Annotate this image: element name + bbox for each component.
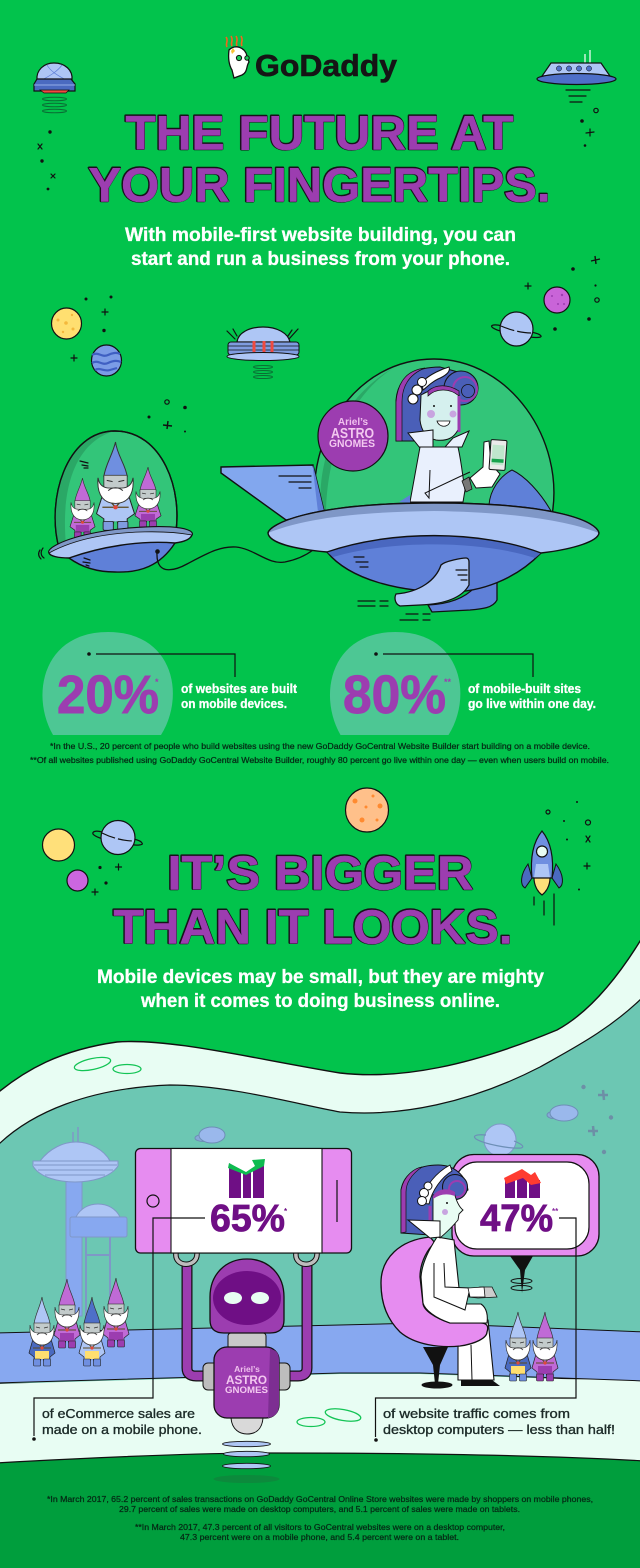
pink planet (67, 870, 88, 891)
title: THE FUTURE AT (126, 107, 514, 160)
yellow planet lower (42, 829, 74, 861)
logo mascot (226, 36, 249, 78)
gnome pair right (505, 1312, 558, 1381)
phone in hand (489, 439, 507, 471)
dome mound (489, 470, 551, 511)
title: THE FUTURE AT (125, 107, 513, 160)
robot body (214, 1347, 279, 1418)
robot arms (187, 1262, 210, 1376)
orange planet (346, 788, 388, 832)
robot thrust rings (222, 1441, 270, 1447)
caption right (383, 1406, 615, 1437)
stat: 80 percent: go live within one day. (468, 697, 596, 711)
stars mid left (148, 400, 187, 432)
heading 2 (113, 847, 512, 954)
stat number: 20% (57, 665, 159, 725)
small floating saucer (195, 1127, 225, 1143)
robot label: GNOMES (225, 1385, 268, 1396)
saucer disc (268, 503, 599, 553)
astronaut (396, 367, 507, 503)
robot label: ASTRO (226, 1373, 267, 1387)
stars upper right (525, 256, 600, 331)
stars right (580, 108, 598, 147)
small saucer hull (69, 541, 175, 572)
connecting cable (157, 547, 313, 570)
stat: 20 percent: * (155, 677, 159, 687)
purple planet (544, 287, 570, 313)
footnotes bottom: 29.7 percent of sales were made on desktop computers, and 5.1 percent of sales were made on tablets. (119, 1504, 520, 1514)
robot label: Ariel’s (234, 1364, 260, 1374)
robot (176, 1253, 317, 1483)
saturn lower (93, 820, 142, 854)
gnome group left (29, 1278, 129, 1366)
subheading 2: Mobile devices may be small, but they are mighty (97, 967, 544, 988)
small centre ufo (227, 327, 299, 378)
icon: bars (228, 1159, 265, 1198)
phone stat panel: * (284, 1207, 288, 1216)
gnome centre (97, 442, 134, 530)
light band wave (0, 933, 640, 1568)
gnome right (135, 467, 161, 527)
robot claws (176, 1253, 317, 1264)
badge: Ariel’s (338, 417, 369, 428)
footnotes bottom: **In March 2017, 47.3 percent of all visitors to GoCentral websites were on a desktop computer, (135, 1522, 505, 1532)
badge: GNOMES (329, 438, 375, 450)
icon: house (504, 1169, 541, 1198)
robot bottom (231, 1418, 263, 1434)
subtitle: With mobile-first website building, you can (125, 225, 516, 246)
stat: 20 percent (42, 632, 298, 735)
phone body (136, 1148, 352, 1253)
heading 2: THAN IT LOOKS. (114, 901, 512, 954)
small planet right (547, 1105, 578, 1121)
robot shoulders (203, 1363, 219, 1390)
stat: 80 percent (330, 632, 596, 735)
footnotes bottom: 47.3 percent were on a mobile phone, and 5.4 percent were on a tablet. (180, 1532, 459, 1542)
logo wordmark: GoDaddy (255, 49, 397, 83)
monitor screen (455, 1162, 589, 1249)
small saucer disc (49, 527, 192, 558)
robot face (213, 1271, 281, 1325)
large ufo with astronaut (221, 359, 599, 620)
back boot (428, 580, 497, 612)
legs (458, 1320, 494, 1380)
stat number: 80% (343, 665, 446, 725)
phone screen (171, 1148, 322, 1253)
stat: 20 percent: on mobile devices. (181, 697, 287, 711)
badge: ASTRO (331, 425, 374, 442)
subtitle (125, 225, 516, 270)
callout line (374, 652, 533, 677)
front boot (395, 558, 469, 606)
stat circle (330, 632, 460, 735)
woman at desk (381, 1165, 500, 1388)
subheading 2 (97, 967, 544, 1012)
large dome (314, 359, 554, 515)
robot label (225, 1364, 268, 1396)
caption: made on a mobile phone. (42, 1422, 202, 1437)
caption right: desktop computers — less than half! (383, 1422, 615, 1437)
blue planet (92, 345, 122, 376)
robot head (210, 1259, 284, 1333)
footnotes bottom: *In March 2017, 65.2 percent of sales transactions on GoDaddy GoCentral Online Store websites were made by shoppers on mobile phones, (47, 1494, 593, 1504)
caption right: of website traffic comes from (383, 1406, 570, 1421)
robot neck (228, 1333, 266, 1349)
rocket (522, 831, 562, 925)
yellow planet (52, 308, 82, 339)
saturn upper right (492, 312, 541, 346)
monitor stat panel (452, 1154, 599, 1293)
small ufo with gnomes (39, 431, 192, 572)
stat: 80 percent: ** (444, 677, 452, 687)
monitor stat panel: ** (552, 1207, 559, 1216)
monitor stand (510, 1256, 533, 1293)
stat caption: of websites are built (181, 682, 298, 696)
feet (461, 1380, 500, 1386)
footnotes top: *In the U.S., 20 percent of people who build websites using the new GoDaddy GoCentral Website Builder start building on a mobile device. (50, 741, 590, 751)
chair base (423, 1347, 448, 1384)
torso (421, 1237, 487, 1323)
heading 2: IT’S BIGGER (168, 847, 474, 900)
collar (428, 1206, 432, 1228)
footnotes top: **Of all websites published using GoDaddy GoCentral Website Builder, roughly 80 percent go live within one day — even when users build on mobile. (30, 755, 609, 765)
logo (226, 36, 397, 83)
callout line (32, 1218, 205, 1441)
muted stars (581, 1085, 613, 1154)
light foreground floor (0, 1374, 640, 1480)
caption (42, 1406, 202, 1437)
callout line right (374, 1218, 576, 1442)
stars left (38, 130, 55, 190)
badge (318, 401, 388, 471)
footnotes top (30, 741, 609, 765)
stat number: 47% (480, 1198, 553, 1240)
tower (33, 1127, 127, 1320)
teal inner region (0, 995, 640, 1384)
heading 2: THAN IT LOOKS. (113, 901, 512, 954)
ufo top left (34, 63, 75, 113)
title: YOUR FINGERTIPS. (88, 159, 550, 212)
stars upper left (71, 296, 112, 361)
gnome left (70, 478, 95, 538)
monitor frame (452, 1154, 599, 1256)
stars near planets (92, 864, 122, 895)
dark green ground (0, 1453, 640, 1568)
home button (147, 1195, 159, 1207)
title: YOUR FINGERTIPS. (88, 159, 550, 212)
title (88, 107, 550, 212)
wing (221, 465, 324, 520)
stars near rocket (546, 801, 590, 890)
green rings (73, 1055, 362, 1426)
saucer hull (327, 536, 541, 592)
ufo top right (537, 50, 616, 102)
hand and keyboard (469, 1287, 497, 1298)
subtitle: start and run a business from your phone. (131, 249, 510, 270)
headband (420, 1165, 452, 1204)
saturn behind monitor (474, 1124, 523, 1156)
callout line (87, 652, 235, 677)
stat number: 65% (210, 1198, 285, 1240)
heading 2: IT’S BIGGER (167, 847, 473, 900)
face (433, 1192, 463, 1238)
subheading 2: when it comes to doing business online. (140, 991, 500, 1012)
hair (401, 1165, 468, 1235)
footnotes bottom (47, 1494, 593, 1542)
blue floor band (0, 1323, 640, 1383)
caption: of eCommerce sales are (42, 1406, 195, 1421)
stat circle (42, 632, 173, 735)
chair (381, 1237, 488, 1347)
stat caption: of mobile-built sites (468, 682, 581, 696)
small dome (55, 431, 177, 548)
phone stat panel (136, 1148, 352, 1253)
